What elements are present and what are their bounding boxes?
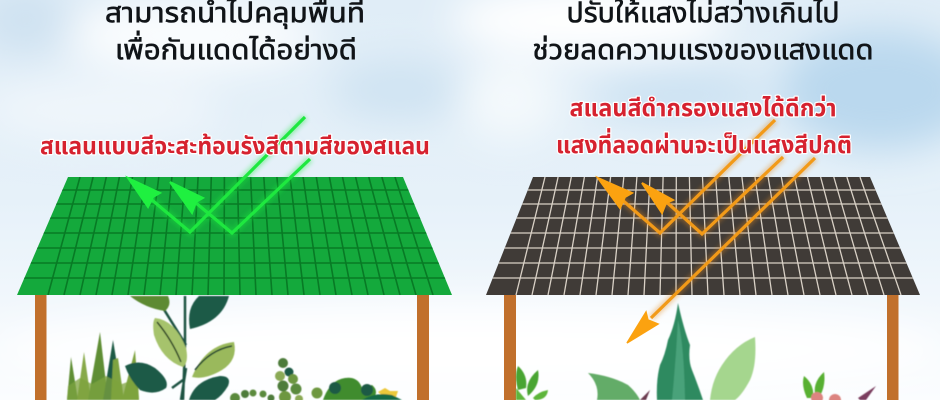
- green plants: [67, 296, 402, 400]
- right posts: [504, 295, 898, 400]
- green roof: [0, 177, 470, 295]
- green glow: [146, 117, 310, 233]
- roof grid: [24, 177, 446, 295]
- green reflected arrows: [128, 117, 310, 233]
- orange arrows: [598, 120, 815, 343]
- right red caption: [556, 94, 852, 159]
- panel: black shade net: [470, 120, 940, 400]
- big dark leaf: [657, 303, 703, 400]
- medium leaf: [588, 373, 640, 400]
- panel: green shade net: [0, 117, 470, 400]
- black roof: [470, 177, 940, 295]
- right title: ช่วยลดความแรงของแสงแดด: [532, 34, 874, 65]
- colourful plants: [516, 303, 876, 400]
- left red caption: สแลนแบบสีจะสะท้อนรังสีตามสีของสแลน: [40, 132, 430, 160]
- purple spikes: [640, 390, 650, 400]
- light leaf: [710, 337, 755, 400]
- bush and yellow flower: [312, 378, 402, 400]
- small left plant: [516, 366, 548, 400]
- right red caption: สแลนสีดำกรองแสงได้ดีกว่า: [570, 94, 836, 122]
- snake plant: [67, 332, 139, 400]
- roof grid: [492, 177, 913, 295]
- left posts: [35, 295, 429, 400]
- left title: [105, 0, 365, 65]
- right red caption: แสงที่ลอดผ่านจะเป็นแสงสีปกติ: [556, 128, 852, 159]
- left title: เพื่อกันแดดได้อย่างดี: [115, 30, 357, 65]
- small right plant and pink flower: [803, 372, 841, 400]
- stem and leaves: [125, 296, 235, 400]
- orange glow: [620, 120, 815, 318]
- fern plants: [230, 358, 303, 400]
- right title: [532, 0, 874, 65]
